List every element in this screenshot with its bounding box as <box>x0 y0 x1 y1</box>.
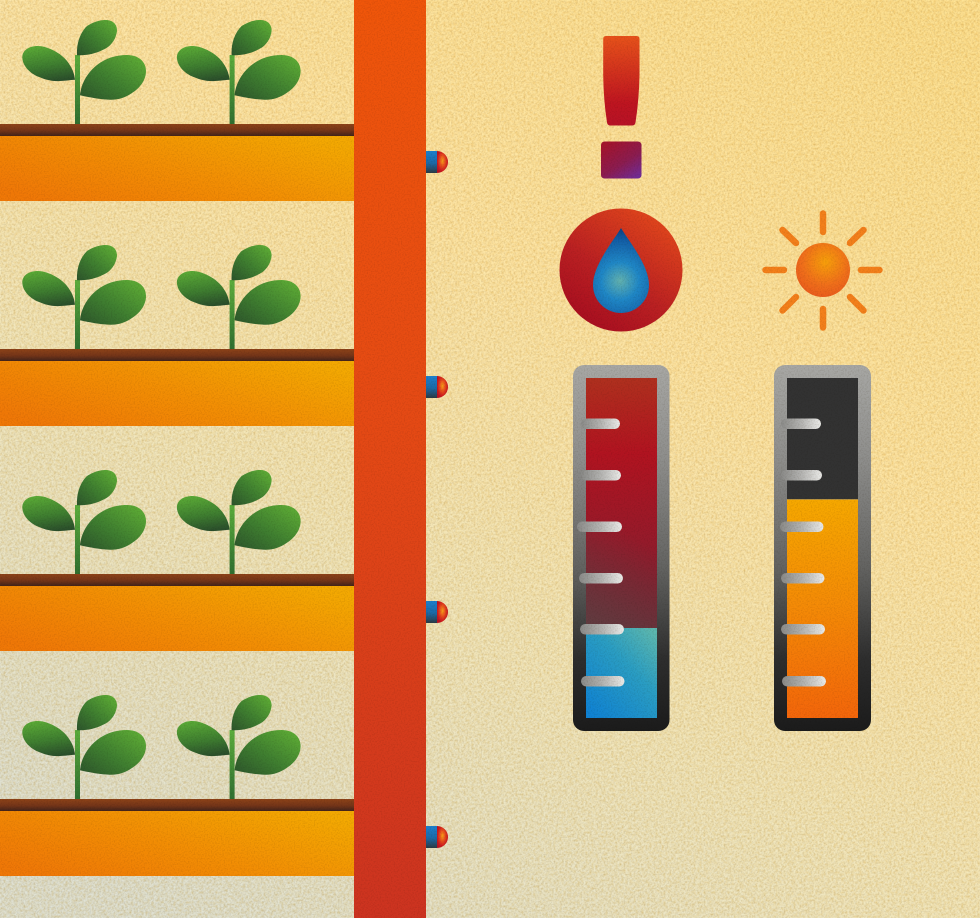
shelf 2 <box>0 245 354 426</box>
gauge frame <box>573 365 670 731</box>
soil <box>0 799 354 811</box>
plant 5 <box>22 470 146 575</box>
gauge: light level <box>774 365 871 731</box>
shelf 3 <box>0 470 354 651</box>
gauge frame <box>774 365 871 731</box>
sensor pod 2 <box>426 376 448 398</box>
plant 1 <box>22 20 146 125</box>
soil <box>0 349 354 361</box>
vertical column <box>354 0 426 918</box>
icon: exclamation mark <box>601 36 642 178</box>
gauge ticks <box>577 418 624 686</box>
depleted portion <box>586 378 657 628</box>
plant 4 <box>177 245 301 350</box>
soil <box>0 574 354 586</box>
plant 6 <box>177 470 301 575</box>
sensor pod 1 <box>426 151 448 173</box>
planter <box>0 136 354 201</box>
light level <box>787 500 858 718</box>
depleted portion <box>787 378 858 499</box>
plant 2 <box>177 20 301 125</box>
gauge ticks <box>780 418 826 686</box>
plant 7 <box>22 695 146 800</box>
shelf 1 <box>0 20 354 201</box>
water level <box>586 628 657 718</box>
planter <box>0 361 354 426</box>
plant 8 <box>177 695 301 800</box>
icon: sun <box>766 214 880 328</box>
shelf 4 <box>0 695 354 876</box>
icon: water drop in red circle <box>560 208 682 332</box>
gauge: water level <box>573 365 670 731</box>
soil <box>0 124 354 136</box>
planter <box>0 811 354 876</box>
planter <box>0 586 354 651</box>
plant 3 <box>22 245 146 350</box>
sensor pod 4 <box>426 826 448 848</box>
sensor pod 3 <box>426 601 448 623</box>
